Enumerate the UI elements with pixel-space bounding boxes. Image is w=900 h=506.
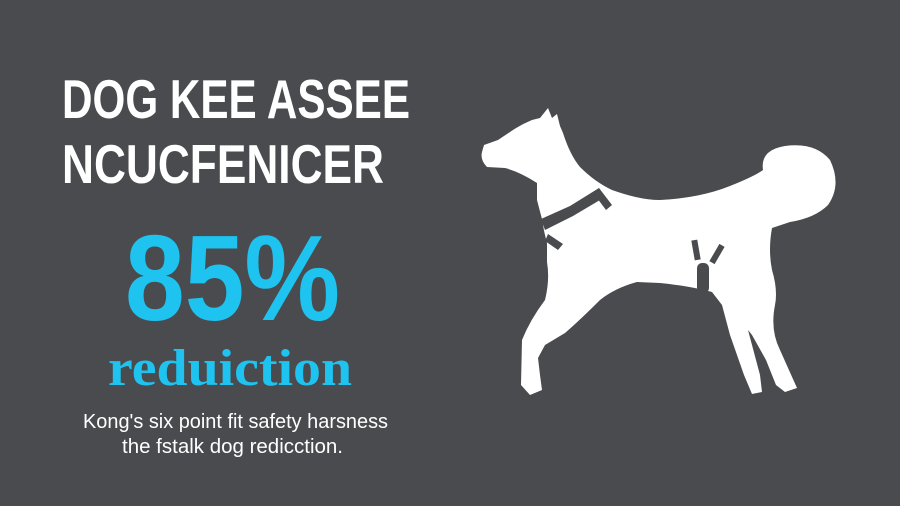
title: DOG KEE ASSEE: [62, 68, 410, 130]
stat label: reduiction: reduiction: [108, 340, 352, 397]
description text: Kong's six point fit safety harsness: [83, 411, 388, 433]
harness: collar: [541, 188, 605, 230]
harness: belly strap: [691, 240, 725, 293]
description text: the fstalk dog redicction.: [122, 436, 343, 458]
stat: 85%: 85%: [125, 210, 340, 346]
title: NCUCFENICER: [62, 133, 384, 195]
description text: [83, 411, 388, 458]
title: [62, 68, 410, 195]
icon: dog silhouette with harness: [482, 108, 836, 395]
